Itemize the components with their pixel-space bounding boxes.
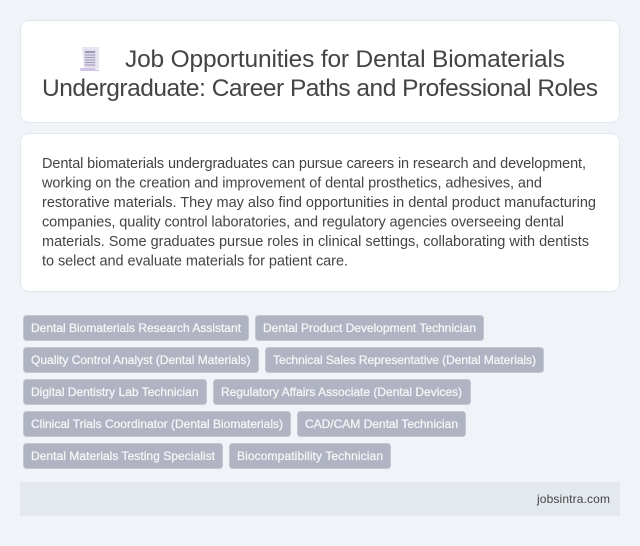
text block: description: to select and evaluate materials for patient care. bbox=[42, 254, 348, 270]
tag: regulatory affairs associate bbox=[214, 380, 470, 404]
panel: description card bbox=[20, 134, 620, 292]
text block: description: working on the creation and improvement of dental prosthetics, adhesives, and bbox=[41, 176, 542, 192]
tag: regulatory affairs associate: Regulatory Affairs Associate (Dental Devices) bbox=[221, 385, 462, 399]
tag: digital dentistry lab technician bbox=[24, 380, 206, 404]
tag: digital dentistry lab technician: Digital Dentistry Lab Technician bbox=[31, 385, 198, 399]
tag: biocompatibility technician bbox=[230, 444, 390, 468]
tag: clinical trials coordinator bbox=[24, 412, 290, 436]
tag: CAD/CAM dental technician: CAD/CAM Dental Technician bbox=[305, 417, 458, 431]
tag: product development technician: Dental Product Development Technician bbox=[263, 321, 476, 335]
title bbox=[42, 46, 598, 102]
footer bar bbox=[20, 482, 620, 516]
tag: research assistant bbox=[24, 316, 248, 340]
footer source text: jobsintra.com bbox=[536, 492, 610, 506]
title: Undergraduate: Career Paths and Professional Roles bbox=[42, 75, 598, 102]
panel: header card bbox=[20, 20, 620, 122]
tag: quality control analyst: Quality Control Analyst (Dental Materials) bbox=[31, 353, 250, 367]
text block: description bbox=[41, 156, 596, 270]
icon: paper scroll bbox=[80, 47, 99, 71]
text block: description: restorative materials. They may also find opportunities in dental product manufacturing bbox=[42, 195, 596, 211]
tag: research assistant: Dental Biomaterials Research Assistant bbox=[31, 321, 242, 335]
text block: description: materials. Some graduates pursue roles in clinical settings, collaborating with dentists bbox=[42, 234, 589, 250]
tag: clinical trials coordinator: Clinical Trials Coordinator (Dental Biomaterials) bbox=[31, 417, 283, 431]
title: Job Opportunities for Dental Biomaterials bbox=[125, 46, 565, 73]
text block: description: Dental biomaterials undergraduates can pursue careers in research and development, bbox=[42, 156, 586, 172]
tag: CAD/CAM dental technician bbox=[298, 412, 466, 436]
tag: technical sales representative bbox=[266, 348, 544, 372]
panel: job role tags bbox=[24, 316, 544, 468]
tag: product development technician bbox=[256, 316, 484, 340]
tag: biocompatibility technician: Biocompatibility Technician bbox=[237, 449, 383, 463]
tag: materials testing specialist: Dental Materials Testing Specialist bbox=[31, 449, 216, 463]
text block: description: companies, quality control laboratories, and regulatory agencies overseeing dental bbox=[42, 214, 564, 230]
tag: quality control analyst bbox=[24, 348, 258, 372]
tag: materials testing specialist bbox=[24, 444, 222, 468]
tag: technical sales representative: Technical Sales Representative (Dental Materials) bbox=[273, 353, 536, 367]
